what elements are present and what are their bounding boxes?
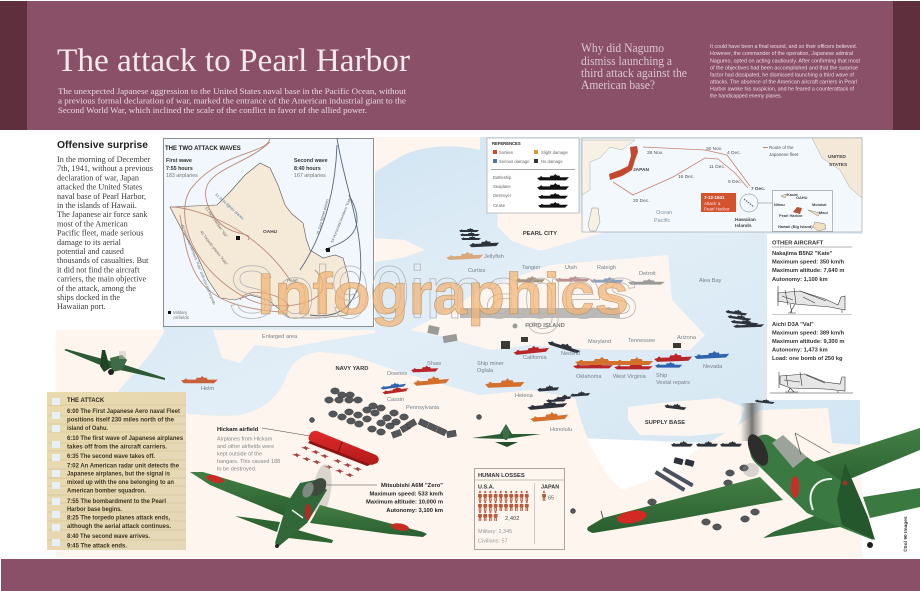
asia coast [582, 140, 635, 195]
offensive surprise text: naval base of Pearl Harbor, [57, 192, 146, 201]
timeline text [67, 398, 184, 550]
second wave label: 8:40 hours [294, 166, 321, 172]
sidebar answer text [710, 44, 861, 100]
footer band [1, 559, 920, 591]
ship and place labels: Ship [656, 373, 667, 379]
ship and place labels: Enlarged area [262, 334, 298, 340]
attack date callout: 7-12-1941 [704, 195, 725, 200]
hawaii inset: Molokai [812, 202, 826, 207]
ship and place labels: Cassin [387, 397, 404, 403]
sidebar answer text: It could have been a final wound, and so their officers believed. [710, 44, 857, 50]
timeline text: 7:02 An American radar unit detects the [67, 464, 180, 470]
val specs: Load: one bomb of 250 kg [772, 356, 843, 362]
panel: references legend: Destroyer [493, 193, 512, 198]
attack date callout: Pearl Harbor [704, 206, 730, 212]
route date labels: 16 Dec. [678, 174, 695, 180]
timeline text: 6:00 The First Japanese Aero naval Fleet [67, 409, 180, 415]
first wave label: First wave [166, 158, 192, 164]
ship and place labels: Neosho [561, 351, 580, 357]
hawaiian islands locator [740, 194, 772, 212]
kate specs: Autonomy: 1,100 km [772, 277, 828, 283]
ship and place labels: Jellyfish [484, 254, 504, 260]
map labels: STATES [829, 162, 848, 168]
ship and place labels: Maryland [588, 339, 611, 345]
usa casualties pictogram [478, 491, 529, 521]
offensive surprise text: Hawaiian port. [57, 302, 106, 311]
kate line drawing [772, 286, 852, 314]
timeline text: takes off from the aircraft carriers. [67, 444, 167, 450]
route date labels: 28 Nov. [647, 150, 663, 156]
ship and place labels: West Virginia [613, 374, 647, 380]
small plane: center [472, 424, 541, 447]
ship and place labels: Curtiss [468, 268, 486, 274]
offensive surprise text: potential and caused [57, 247, 124, 256]
hickam airfield text: hangars. This caused 188 [217, 459, 280, 465]
propeller blur [740, 403, 764, 441]
header band [0, 1, 920, 130]
sidebar question: Why did Nagumo [581, 41, 664, 55]
val line drawing [770, 372, 853, 393]
second wave label [294, 158, 328, 179]
panel: references legend: REFERENCES [492, 141, 521, 146]
kate specs: Nakajima B5N2 "Kate" [772, 251, 833, 257]
legend: military airfields: Airfields [173, 315, 190, 320]
united states land [812, 138, 862, 198]
panel: references legend [487, 138, 579, 213]
route date labels: 11 Dec. [709, 164, 725, 170]
hickam airfield text: kept outside of the [217, 452, 262, 458]
ship and place labels: Utah [565, 265, 577, 271]
ship and place labels: Honolulu [550, 427, 572, 433]
panel: references legend: Battleship [493, 175, 512, 180]
plane: mitsubishi zero [190, 463, 427, 548]
offensive surprise text: attacked the United States [57, 183, 142, 192]
timeline text: 6:35 The second wave takes off. [67, 454, 155, 460]
title: The attack to Pearl Harbor [57, 43, 410, 79]
panel: human losses: 2,402 [505, 516, 520, 522]
sidebar answer text: Nagumo, opted on acting cautiously. After confirming that most [710, 58, 861, 64]
timeline text: 8:25 The torpedo planes attack ends, [67, 516, 170, 522]
inset heading: THE TWO ATTACK WAVES [165, 146, 241, 152]
sidebar answer text: Harbor awoke his suspicion, and he feared a counterattack of [710, 86, 855, 92]
ship and place labels: Tennessee [628, 338, 655, 344]
offensive surprise text: most of the American [57, 219, 128, 228]
ship and place labels: Tangier [522, 265, 540, 271]
plane: nakajima foreground [587, 403, 920, 548]
wave route labels [180, 193, 353, 305]
legend: military airfields [173, 310, 190, 320]
panel: human losses: JAPAN [541, 484, 559, 490]
hickam airfield text: and other airfields were [217, 444, 274, 450]
first wave label [166, 158, 198, 179]
sidebar answer text: However, the commander of the operation, Japanese admiral [710, 51, 853, 57]
intro text: a previous formal declaration of war, marked the entrance of the American industrial giant to the [58, 96, 406, 106]
timeline text: 7:55 The bombardment to the Pearl [67, 499, 166, 505]
sidebar answer text: attacks. The absence of the American aircraft carriers in Pearl [710, 80, 857, 86]
val specs: Autonomy: 1,473 km [772, 348, 828, 354]
wave route labels: 51 Aichi bomber "Val" [204, 206, 229, 239]
pearl harbor label: Pearl [287, 278, 298, 283]
oahu label: OAHU [263, 229, 278, 235]
offensive surprise heading: Offensive surprise [57, 139, 148, 151]
ship and place labels: Vestal repairs [656, 380, 690, 386]
panel: references legend: Sunken [499, 150, 514, 155]
panel: human losses: Civilians: 57 [478, 538, 508, 544]
panel: human losses [474, 468, 564, 550]
japan casualties pictogram [542, 491, 546, 501]
ship and place labels: Nevada [703, 364, 723, 370]
hawaii inset [772, 190, 832, 232]
attack date callout [701, 193, 736, 212]
other aircraft heading: OTHER AIRCRAFT [772, 240, 824, 246]
harbor map base [56, 137, 862, 558]
second wave label: 167 airplanes [294, 173, 326, 179]
intro text [58, 87, 407, 115]
dock and buildings on ford island [427, 308, 620, 343]
wave route labels: 35 Zero fighter planes [316, 198, 330, 235]
ship and place labels: SUPPLY BASE [645, 420, 685, 426]
wave route labels: 49 Horizontal bombers "Kate" and cost fold torpedo [180, 224, 216, 305]
attack date callout: Attack a [704, 201, 721, 206]
val specs: Maximum altitude: 9,300 m [772, 339, 844, 345]
route date labels: 20 Dec. [633, 198, 650, 204]
orange damaged ships [181, 357, 653, 422]
val specs [772, 322, 845, 362]
zero specifications: Autonomy: 3,100 km [386, 508, 443, 514]
offensive surprise text: declaration of war, Japan [57, 173, 139, 182]
hawaii inset: OAHU [796, 195, 808, 200]
panel: route of the japanese fleet map [582, 138, 862, 232]
ship and place labels: Arizona [677, 335, 697, 341]
map labels: Islands [735, 223, 752, 229]
hawaii inset: Nihau [774, 202, 785, 207]
zero specifications [327, 483, 443, 514]
legend: military airfields: Military [173, 310, 188, 315]
ship and place labels: Downes [387, 371, 407, 377]
dark moored ships [459, 228, 775, 492]
timeline text: Japanese airplanes, but the signal is [67, 472, 171, 478]
ship and place labels: Raleigh [597, 265, 616, 271]
kate specs: Maximum altitude: 7,640 m [772, 268, 844, 274]
parked destroyed airplanes [292, 446, 362, 478]
timeline text: 9:45 The attack ends. [67, 544, 127, 550]
sidebar question [581, 41, 687, 92]
hawaii inset: Hawaii (Big Island) [778, 224, 813, 229]
watermark: Infographics [257, 262, 629, 327]
timeline text: THE ATTACK [67, 398, 105, 404]
oahu island [170, 163, 350, 318]
kate specs: Maximum speed: 350 km/h [772, 260, 845, 266]
route date labels: 9 Dec. [728, 179, 742, 185]
small plane: upper left [64, 349, 165, 380]
offensive surprise text: it did not find the aircraft [57, 265, 140, 274]
second wave label: Second wave [294, 158, 328, 164]
route date labels [633, 146, 765, 204]
intro text: Second World War, which inclined the scale of the conflict in favor of the allied power. [58, 106, 367, 115]
binder holes [52, 398, 60, 546]
offensive surprise text [57, 155, 153, 311]
hickam airfield hangars [308, 431, 379, 466]
offensive surprise text: damage to its aerial [57, 238, 122, 247]
wave route labels: 40 Torpedo planes "Kate" [199, 230, 229, 267]
timeline text: 6:10 The first wave of Japanese airplanes [67, 436, 184, 442]
timeline text: mixed up with the one belonging to an [67, 480, 174, 486]
ship and place labels: Oglala [477, 368, 494, 374]
hawaii inset: Maui [819, 210, 828, 215]
ship and place labels: Alea Bay [699, 278, 722, 284]
ship and place labels: Helena [515, 393, 534, 399]
ford island [410, 255, 705, 350]
attack routes [172, 138, 361, 316]
ocean label: Ocean [656, 210, 672, 216]
offensive surprise text: 7th, 1941, without a previous [57, 164, 153, 173]
zero specifications: Mitsubishi A6M "Zero" [381, 483, 443, 489]
wave route labels: 54 Horizontal bombers "Kate" [330, 195, 353, 243]
offensive surprise text: Pacific fleet, made serious [57, 229, 143, 238]
ship and place labels: Ship miner [477, 361, 504, 367]
route legend: Japanese fleet [769, 152, 799, 157]
ship and place labels [201, 231, 723, 433]
zero specifications: Maximum altitude: 10,000 m [366, 500, 443, 506]
offensive surprise text: of the attack, among the [57, 284, 136, 293]
supply base land [628, 398, 745, 436]
panel: references legend: No damage [541, 159, 563, 164]
timeline text: 8:40 The second wave arrives. [67, 534, 150, 540]
panel: human losses: U.S.A. [478, 484, 495, 490]
ship and place labels: PEARL CITY [523, 231, 557, 237]
ship and place labels: Pennsylvania [406, 405, 440, 411]
route date labels: 30 Nov. [706, 146, 722, 152]
first wave label: 7:55 hours [166, 166, 193, 172]
red sunken ships [382, 344, 692, 395]
timeline text: American bomber squadron. [67, 488, 146, 494]
timeline text: although the aerial attack continues. [67, 524, 171, 530]
credit: ©Sol 90 Images [902, 516, 909, 552]
sidebar answer text: factor had dissipated, he dismissed launching a third wave of [710, 72, 855, 78]
ship and place labels: NAVY YARD [336, 366, 368, 372]
sidebar question: American base? [581, 78, 655, 92]
val specs: Aichi D3A "Val" [772, 322, 814, 328]
ship and place labels: FORD ISLAND [525, 323, 565, 329]
route date labels: 4 Dec. [727, 150, 741, 156]
route legend [763, 145, 799, 157]
pale anchored ships [446, 251, 665, 285]
hawaii inset: Pearl Harbor [779, 213, 803, 218]
hickam airfield text [217, 427, 310, 472]
japan [609, 146, 638, 180]
hawaii inset: Kauai [787, 192, 798, 197]
sidebar question: third attack against the [581, 66, 687, 80]
ocean label: Pacific [654, 218, 670, 224]
map labels: Hawaiian [735, 217, 756, 223]
offensive surprise text: ships docked in the [57, 293, 120, 302]
intro text: The unexpected Japanese aggression to the United States naval base in the Pacific Ocean, without [58, 87, 407, 96]
ship and place labels: Detroit [639, 271, 656, 277]
ship and place labels: Shaw [427, 361, 442, 367]
ocean label [654, 210, 672, 224]
panel: human losses: Military: 2,345 [478, 529, 512, 535]
timeline text: Harbor base begins. [67, 507, 122, 513]
kate specs [772, 251, 845, 283]
offensive surprise text: The Japanese air force sank [57, 210, 148, 219]
map labels: UNITED [828, 154, 846, 160]
blue damaged ships [380, 350, 730, 390]
sidebar question: dismiss launching a [581, 54, 672, 68]
val specs: Maximum speed: 389 km/h [772, 330, 845, 336]
map labels [633, 154, 848, 229]
offensive surprise text: carriers, the main objective [57, 275, 146, 284]
zero specifications: Maximum speed: 533 km/h [370, 492, 443, 498]
offensive surprise text: in the islands of Hawaii. [57, 201, 137, 210]
route legend: Route of the [769, 145, 794, 150]
offensive surprise text: thousands of casualties. But [57, 256, 149, 265]
watermark: Sol90images [228, 251, 638, 334]
panel: human losses: HUMAN LOSSES [478, 473, 525, 479]
timeline text: positions itself 230 miles north of the [67, 418, 175, 424]
first wave label: 183 airplanes [166, 173, 198, 179]
ships and harbor features [181, 228, 775, 530]
wave route labels: 51 Aichi fighter planes [214, 193, 245, 221]
hickam airfield text: to be destroyed. [217, 466, 257, 472]
hickam airfield text: Hickam airfield [217, 427, 259, 433]
panel: references legend: Cruise [493, 203, 506, 208]
sidebar answer text: of the objectives had been accomplished and that the surprise [710, 66, 858, 72]
timeline text: island of Oahu. [67, 426, 108, 432]
ship and place labels: Oklahoma [576, 374, 602, 380]
offensive surprise text: In the morning of December [57, 155, 150, 164]
ship and place labels: California [523, 355, 548, 361]
fuel tanks [310, 388, 759, 530]
panel: human losses: 65 [548, 496, 554, 502]
panel: references legend: Slight damage [541, 150, 568, 155]
panel: the attack timeline note [47, 392, 186, 550]
sidebar answer text: the handicapped enemy planes. [710, 94, 782, 100]
ship and place labels: Helm [201, 386, 214, 392]
hickam airfield text: Airplanes from Hickam [217, 436, 273, 442]
dark buildings [501, 337, 681, 349]
map markers [168, 236, 330, 314]
map labels: JAPAN [633, 167, 649, 173]
panel: other aircraft [767, 234, 862, 400]
route date labels: 7 Dec. [751, 186, 765, 192]
panel: references legend: Serious damage [499, 159, 530, 164]
fleet routes [613, 147, 750, 195]
panel: references legend: Seaplane [493, 184, 511, 189]
panel: two attack waves map [164, 138, 374, 326]
